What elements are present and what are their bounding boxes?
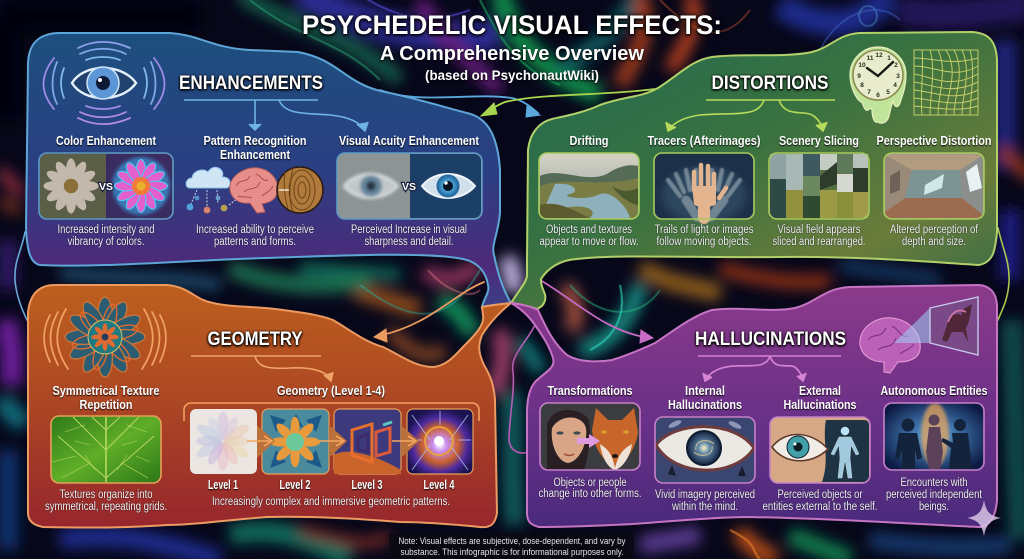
description: vibrancy of colors. [68, 236, 144, 248]
item: autonomous entities [880, 383, 988, 513]
icon: melting clock: 4 [893, 82, 897, 89]
title: PSYCHEDELIC VISUAL EFFECTS: [302, 10, 722, 40]
image: hand trails [654, 153, 754, 223]
item: geometry levels [184, 383, 479, 508]
description: Encounters with [900, 477, 968, 489]
image: dull vs vivid flower: VS [99, 181, 113, 193]
description: Trails of light or images [654, 224, 754, 236]
icon: melting clock: 9 [857, 73, 861, 80]
description [654, 224, 754, 248]
description: symmetrical, repeating grids. [45, 501, 167, 513]
icon: melting clock: 11 [867, 55, 874, 62]
description [772, 224, 866, 248]
item: internal hallucinations: Hallucinations [668, 397, 742, 412]
description: patterns and forms. [214, 236, 296, 248]
image: level 1 [190, 409, 257, 474]
connector lines between the panels [15, 89, 1009, 453]
arrow: enhancements to distortions [380, 90, 540, 117]
image: blurred vs sharp eye: VS [402, 181, 416, 193]
item: color enhancement [39, 133, 173, 248]
item: symmetrical texture repetition [45, 383, 167, 513]
item: pattern recognition enhancement [186, 133, 323, 248]
level labels: Level 2 [280, 477, 310, 492]
title: A Comprehensive Overview [380, 42, 644, 65]
item: visual acuity enhancement [337, 133, 482, 248]
heading rule and arrows [698, 356, 841, 381]
panel: hallucinations [511, 285, 997, 527]
panel: distortions [511, 32, 997, 309]
icon: eye with vibration arcs [44, 42, 164, 124]
image: level 3 [334, 409, 401, 474]
item: internal hallucinations [655, 383, 755, 513]
heading: geometry: GEOMETRY [208, 329, 303, 350]
icon: sparkle [967, 500, 1001, 536]
arrow: distortions to enhancements [481, 89, 655, 116]
image: eye with galaxy [655, 417, 755, 483]
item: autonomous entities: Autonomous Entities [880, 383, 988, 398]
image: woman turning into fox [540, 403, 640, 470]
item: internal hallucinations: Internal [685, 383, 725, 398]
description: depth and size. [902, 236, 966, 248]
icon: melting clock: 12 [875, 52, 883, 59]
description [655, 489, 755, 513]
item: external hallucinations: External [799, 383, 841, 398]
description [538, 477, 642, 500]
item: scenery slicing [769, 133, 869, 248]
image: leaf veins [51, 416, 161, 483]
note [389, 533, 634, 559]
description: perceived independent [886, 489, 983, 501]
icon: melting clock: 7 [867, 89, 871, 96]
icon: melting clock: 3 [896, 73, 900, 80]
title [302, 10, 722, 83]
icon: warped grid [914, 50, 978, 115]
heading: hallucinations: HALLUCINATIONS [695, 329, 846, 350]
icon: melting clock [850, 47, 906, 123]
description: appear to move or flow. [540, 236, 638, 248]
icon: mandala with arcs [44, 297, 166, 377]
level labels: Level 3 [352, 477, 382, 492]
item: tracers: Tracers (Afterimages) [648, 133, 760, 148]
icon: melting clock: 2 [894, 62, 898, 69]
description: Increasingly complex and immersive geometric patterns. [212, 496, 450, 508]
item: pattern recognition enhancement: Pattern Recognition [204, 133, 307, 148]
item: symmetrical texture repetition: Symmetrical Texture [52, 383, 160, 398]
item: color enhancement: Color Enhancement [56, 133, 157, 148]
description [58, 224, 154, 248]
item: external hallucinations [762, 383, 878, 513]
description: Textures organize into [60, 489, 152, 501]
item: drifting: Drifting [570, 133, 609, 148]
side connector lines [15, 228, 1009, 453]
description: sliced and rearranged. [772, 236, 866, 248]
description: entities external to the self. [762, 501, 878, 513]
image: flowing landscape [539, 153, 639, 219]
icon: melting clock: 5 [886, 89, 890, 96]
note: Note: Visual effects are subjective, dose-dependent, and vary by [398, 536, 626, 546]
image: eye and glowing figure [770, 417, 870, 483]
level labels: Level 1 [208, 477, 238, 492]
description [886, 477, 983, 513]
bracket [184, 403, 479, 421]
description [351, 224, 467, 248]
item: perspective distortion: Perspective Distortion [876, 133, 992, 148]
level labels: Level 4 [424, 477, 455, 492]
arrows between the levels [247, 425, 419, 458]
description: beings. [919, 501, 949, 513]
description: Perceived Increase in visual [351, 224, 467, 236]
description [196, 224, 314, 248]
description: Vivid imagery perceived [655, 489, 755, 501]
panel: enhancements [26, 33, 511, 307]
item: tracers [648, 133, 760, 248]
item: pattern recognition enhancement: Enhancement [220, 147, 291, 162]
description: change into other forms. [538, 488, 642, 500]
description: Visual field appears [778, 224, 861, 236]
image: level 2 [262, 409, 329, 474]
bottom band [60, 537, 220, 559]
description: Increased intensity and [58, 224, 154, 236]
image: sliced landscape [769, 153, 869, 219]
item: external hallucinations: Hallucinations [784, 397, 856, 412]
description [762, 489, 878, 513]
image: distorted room [884, 153, 984, 219]
icon: melting clock: 6 [876, 92, 880, 99]
image: glowing silhouettes [884, 403, 984, 470]
item: geometry levels: Geometry (Level 1-4) [277, 383, 385, 398]
item: transformations: Transformations [548, 383, 632, 398]
item: transformations [538, 383, 642, 500]
title: (based on PsychonautWiki) [425, 67, 599, 83]
image: level 4 [407, 409, 473, 474]
note: substance. This infographic is for informational purposes only. [400, 547, 624, 557]
heading rule and arrow [191, 356, 333, 381]
description: Altered perception of [890, 224, 979, 236]
description: Objects or people [554, 477, 626, 489]
description: sharpness and detail. [364, 236, 454, 248]
description: Perceived objects or [778, 489, 863, 501]
description [890, 224, 979, 248]
description [45, 489, 167, 513]
arrow: to geometry [374, 282, 484, 342]
heading: enhancements: ENHANCEMENTS [179, 73, 323, 94]
item: drifting [539, 133, 639, 248]
level labels [208, 477, 455, 492]
arrow: to hallucinations [540, 280, 653, 343]
description: within the mind. [671, 501, 738, 513]
heading: distortions: DISTORTIONS [712, 73, 828, 94]
icon: brain projecting a winged horse [860, 297, 978, 373]
icon: melting clock: 8 [860, 82, 864, 89]
icon: cloud, brain and wood grain [186, 167, 323, 213]
item: scenery slicing: Scenery Slicing [779, 133, 859, 148]
item: perspective distortion [876, 133, 992, 248]
description: Increased ability to perceive [196, 224, 314, 236]
image: blurred vs sharp eye [337, 153, 482, 219]
heading rule and arrows [666, 100, 835, 131]
description: Objects and textures [546, 224, 632, 236]
heading rule and arrows [184, 100, 368, 131]
centre lobes [425, 265, 480, 279]
item: visual acuity enhancement: Visual Acuity Enhancement [339, 133, 480, 148]
icon: melting clock: 1 [887, 55, 891, 62]
icon: melting clock: 10 [858, 62, 866, 69]
description: follow moving objects. [656, 236, 752, 248]
description [540, 224, 638, 248]
panel: geometry [28, 285, 511, 528]
item: symmetrical texture repetition: Repetition [80, 397, 133, 412]
